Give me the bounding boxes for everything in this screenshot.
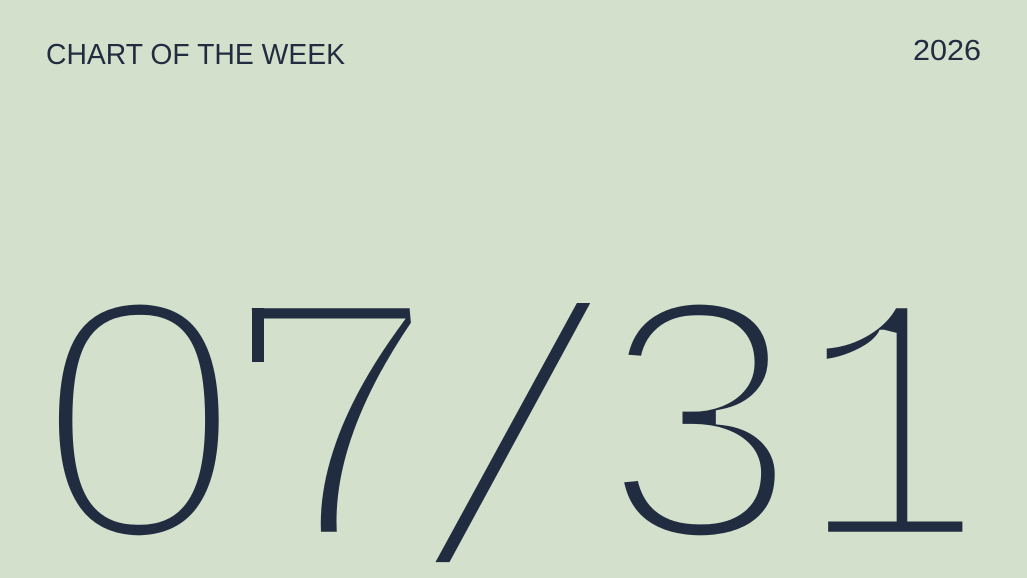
large date <box>26 237 987 578</box>
heading: chart of the week: CHART OF THE WEEK <box>46 39 346 71</box>
year: 2026 <box>913 35 981 67</box>
